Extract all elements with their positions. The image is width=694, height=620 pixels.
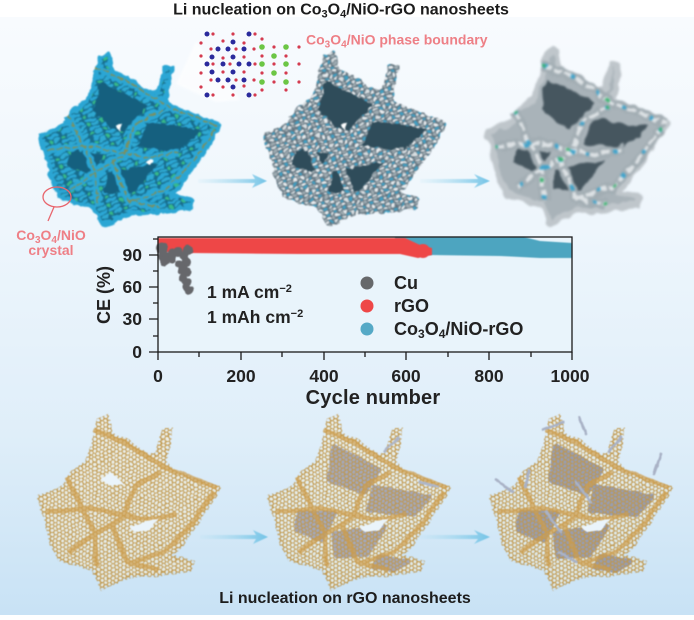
- x tick labels: 600: [391, 366, 421, 386]
- chart: coulombic efficiency: [94, 237, 590, 409]
- legend: 3: [418, 327, 425, 341]
- annotation: test conditions: [207, 282, 303, 327]
- arrow: top first: [198, 174, 267, 188]
- series: rGO: [158, 238, 432, 258]
- x tick labels: [153, 366, 590, 386]
- chart plot background: [158, 237, 572, 352]
- title: top: O: [328, 2, 340, 18]
- arrow: bottom second: [420, 530, 490, 544]
- label: phase boundary: /NiO phase boundary: [347, 32, 488, 48]
- y tick labels: 30: [123, 309, 142, 329]
- plot frame: [158, 237, 572, 352]
- arrow: top second: [420, 174, 490, 188]
- label: crystal: 4: [51, 235, 57, 246]
- title: top: /NiO-rGO nanosheets: [346, 2, 509, 18]
- title: bottom: Li nucleation on rGO nanosheets: [219, 590, 471, 607]
- structure: rGO Li partial: [269, 416, 449, 588]
- annotation: test conditions: −2: [291, 308, 303, 320]
- series: Cu: [156, 242, 194, 294]
- x tick labels: 0: [153, 366, 163, 386]
- label: phase boundary: 4: [341, 40, 347, 50]
- legend: 4: [439, 327, 446, 341]
- legend: Cu: [394, 273, 418, 293]
- x tick labels: 400: [309, 366, 339, 386]
- atomic lattice: phase boundary: [199, 32, 301, 98]
- series: Co3O4/NiO-rGO: [395, 237, 572, 258]
- label: crystal: crystal: [28, 242, 74, 258]
- structure: Co3O4/NiO-rGO Li partial: [265, 53, 445, 225]
- y tick labels: 0: [132, 342, 142, 362]
- y axis title: CE (%): [94, 266, 114, 324]
- x tick labels: 1000: [551, 366, 590, 386]
- label: phase boundary: Co: [306, 32, 325, 48]
- legend: [360, 273, 523, 341]
- axis ticks: [149, 239, 572, 360]
- structure: rGO Li full: [491, 416, 671, 588]
- y tick labels: 60: [123, 277, 142, 297]
- structure: Co3O4/NiO-rGO pristine: [40, 54, 220, 226]
- legend: O: [425, 319, 439, 339]
- y tick labels: 90: [123, 245, 142, 265]
- label: phase boundary: 3: [325, 40, 331, 50]
- callout: crystal circle and leader: [43, 187, 71, 221]
- structure: rGO pristine: [39, 416, 219, 588]
- x tick labels: 800: [474, 366, 504, 386]
- label: crystal: 3: [35, 235, 41, 246]
- x tick labels: 200: [226, 366, 256, 386]
- arrow: bottom first: [200, 530, 268, 544]
- annotation: test conditions: 1 mA cm: [207, 282, 279, 302]
- legend: /NiO-rGO: [445, 319, 523, 339]
- annotation: test conditions: 1 mAh cm: [207, 307, 291, 327]
- x axis title: Cycle number: [306, 387, 440, 409]
- title: top: 3: [322, 8, 328, 20]
- label: crystal: O: [40, 227, 52, 243]
- structure: Co3O4/NiO-rGO Li full: [487, 51, 667, 223]
- callout wedge: phase boundary: [176, 42, 240, 102]
- legend: rGO: [394, 296, 429, 316]
- legend: Co: [394, 319, 418, 339]
- y tick labels: [123, 245, 142, 362]
- label: crystal: Co: [16, 227, 35, 243]
- title: top: 4: [340, 8, 347, 20]
- annotation: test conditions: −2: [279, 283, 292, 295]
- label: phase boundary: O: [330, 32, 341, 48]
- title: top: Li nucleation on Co: [173, 2, 322, 18]
- label: crystal: /NiO: [57, 227, 86, 243]
